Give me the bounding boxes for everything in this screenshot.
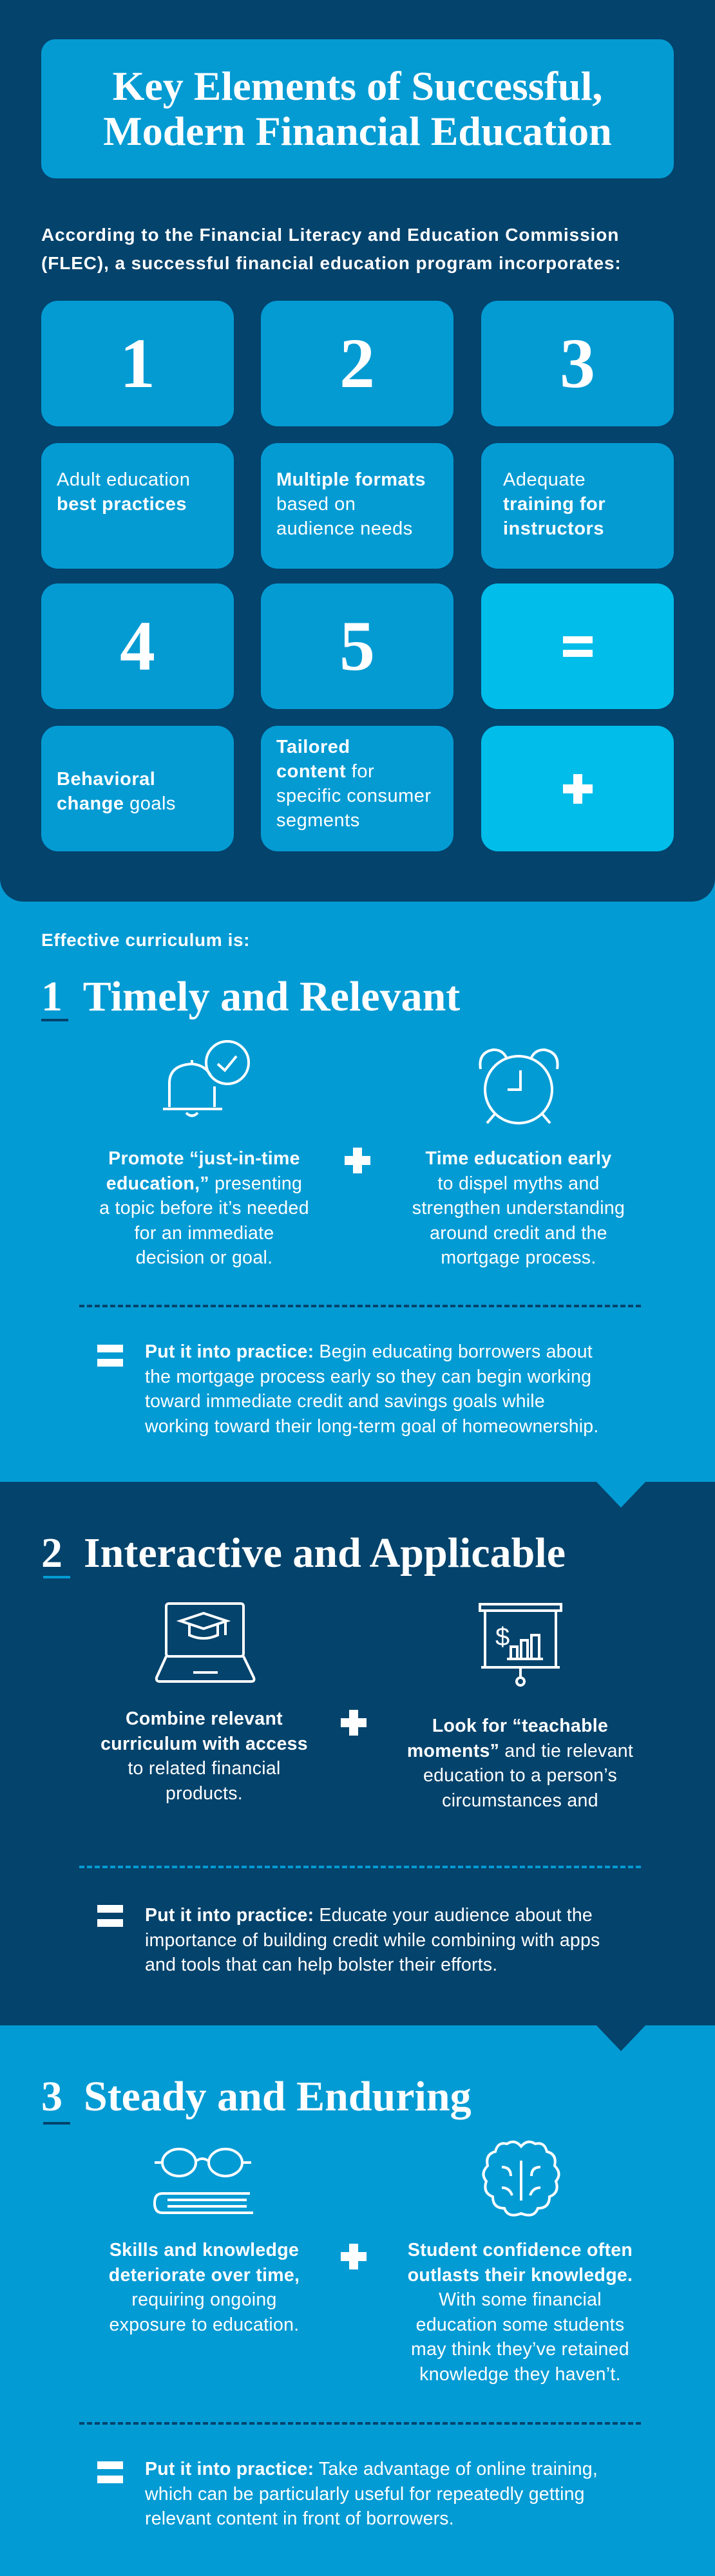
icon: presentation board: $	[495, 1623, 510, 1651]
text: time education early: to dispel myths and	[437, 1173, 600, 1194]
text: time education early: strengthen understanding	[412, 1198, 625, 1218]
icon: alarm clock	[479, 1048, 559, 1124]
practice text 1: Put it into practice: Begin educating borrowers about	[145, 1341, 593, 1362]
text: skills deteriorate	[109, 2240, 300, 2335]
text: just-in-time: education,” presenting	[106, 1173, 302, 1194]
practice text 3: Put it into practice: Take advantage of online training,	[145, 2459, 598, 2479]
cell: text 3: Adequate	[503, 469, 586, 490]
text: combine relevant curriculum: products.	[166, 1783, 243, 1804]
icon: equals 3	[97, 2461, 123, 2483]
title box: Key Elements of Successful,	[113, 63, 602, 109]
icon: glasses and book	[153, 2148, 253, 2214]
title box: Modern Financial Education	[103, 108, 612, 154]
text: combine relevant curriculum: curriculum with access	[100, 1734, 308, 1754]
text: time education early: mortgage process.	[441, 1247, 596, 1268]
text: skills deteriorate: exposure to education.	[110, 2315, 299, 2335]
icon: laptop with cap	[155, 1602, 255, 1683]
text: skills deteriorate: Skills and knowledge	[110, 2240, 299, 2260]
cell: text 4: change goals	[57, 793, 176, 814]
panel: key elements header (navy)	[0, 0, 715, 902]
cell: text 2	[261, 443, 453, 569]
practice text 1: toward immediate credit and savings goals while	[145, 1391, 545, 1412]
text: time education early	[412, 1148, 625, 1268]
icon: brain	[482, 2141, 560, 2217]
text: skills deteriorate: requiring ongoing	[131, 2289, 277, 2310]
icon: bell with check	[163, 1040, 250, 1117]
cell: number 5: 5	[339, 607, 375, 685]
practice text 2: importance of building credit while combining with apps	[145, 1929, 600, 1950]
cell: text 2: Multiple formats	[276, 469, 426, 490]
text: skills deteriorate: deteriorate over time,	[109, 2265, 300, 2286]
section 3 heading: 3 Steady and Enduring	[41, 2073, 472, 2120]
intro text	[41, 225, 622, 273]
cell: text 5: content for	[276, 761, 374, 782]
icon: presentation board	[479, 1603, 562, 1687]
panel: section 2 navy	[0, 1482, 715, 2025]
cell: text 3: training for	[503, 494, 605, 515]
practice text 3: which can be particularly useful for repeatedly getting	[145, 2483, 585, 2504]
text: student confidence: knowledge they haven’t.	[419, 2364, 621, 2385]
cell: text 1	[41, 443, 234, 569]
cell: number 1: 1	[120, 324, 155, 402]
text: teachable moments: Look for “teachable	[432, 1716, 608, 1736]
text: teachable moments: moments” and tie relevant	[407, 1741, 633, 1761]
cell: text 5	[261, 726, 453, 851]
text: student confidence: outlasts their knowledge.	[408, 2265, 633, 2286]
pointer: section 2	[596, 2025, 645, 2051]
practice text 2	[145, 1905, 600, 1975]
intro text: (FLEC), a successful financial education program incorporates:	[41, 253, 622, 273]
practice text 2: and tools that can help bolster their efforts.	[145, 1955, 497, 1975]
icon: plus 2	[341, 1710, 367, 1736]
cell: text 5: segments	[276, 810, 360, 831]
text: student confidence: With some financial	[439, 2289, 602, 2310]
text: time education early: around credit and the	[430, 1223, 607, 1244]
cell: text 2: audience needs	[276, 518, 413, 539]
cell: number 4	[41, 583, 234, 709]
text: teachable moments: education to a person’s	[423, 1765, 617, 1786]
text: just-in-time: for an immediate	[134, 1223, 274, 1244]
text: student confidence: education some students	[416, 2315, 624, 2335]
cell: number 2	[261, 301, 453, 426]
icon: plus 1	[345, 1148, 370, 1173]
practice text 1: working toward their long-term goal of homeownership.	[145, 1416, 598, 1436]
text: teachable moments: circumstances and	[442, 1790, 598, 1811]
text: combine relevant curriculum	[100, 1709, 308, 1804]
cell: text 4: Behavioral	[57, 769, 155, 790]
cell: number 5	[261, 583, 453, 709]
cell: text 1: best practices	[57, 494, 187, 515]
text: teachable moments	[407, 1716, 633, 1811]
cell: text 2: based on	[276, 494, 356, 515]
cell: equals	[481, 583, 674, 709]
cell: text 5: specific consumer	[276, 786, 432, 806]
text: just-in-time	[99, 1148, 309, 1268]
cell: text 4	[41, 726, 234, 851]
cell: text 5: Tailored	[276, 737, 350, 757]
text: student confidence: Student confidence often	[408, 2240, 633, 2260]
title box	[41, 39, 674, 178]
text: time education early: Time education early	[425, 1148, 612, 1169]
cell: number 3	[481, 301, 674, 426]
cell: number 2: 2	[339, 324, 375, 402]
icon: equals 2	[97, 1905, 123, 1927]
practice text 2: Put it into practice: Educate your audience about the	[145, 1905, 593, 1926]
label: effective curriculum: Effective curriculum is:	[41, 930, 250, 950]
practice text 1	[145, 1341, 598, 1436]
cell: text 3	[481, 443, 674, 569]
practice text 3	[145, 2459, 598, 2529]
cell: number 3: 3	[560, 324, 595, 402]
icon: equals 1	[97, 1345, 123, 1367]
text: student confidence: may think they’ve retained	[411, 2339, 629, 2360]
practice text 3: relevant content in front of borrowers.	[145, 2508, 454, 2529]
section 2 heading: 2 Interactive and Applicable	[41, 1530, 566, 1577]
intro text: According to the Financial Literacy and Education Commission	[41, 225, 619, 245]
text: student confidence	[408, 2240, 633, 2385]
text: combine relevant curriculum: Combine relevant	[126, 1709, 283, 1729]
cell: text 1: Adult education	[57, 469, 190, 490]
cell: number 1	[41, 301, 234, 426]
pointer: section 1	[596, 1482, 645, 1508]
cell: text 3: instructors	[503, 518, 604, 539]
icon: plus 3	[341, 2244, 367, 2269]
text: just-in-time: Promote “just-in-time	[108, 1148, 300, 1169]
text: just-in-time: a topic before it’s needed	[99, 1198, 309, 1218]
cell: number 4: 4	[120, 607, 155, 685]
text: combine relevant curriculum: to related financial	[128, 1758, 281, 1779]
text: just-in-time: decision or goal.	[136, 1247, 272, 1268]
practice text 1: the mortgage process early so they can begin working	[145, 1367, 591, 1387]
section 1 heading: 1 Timely and Relevant	[41, 973, 460, 1020]
cell: plus	[481, 726, 674, 851]
